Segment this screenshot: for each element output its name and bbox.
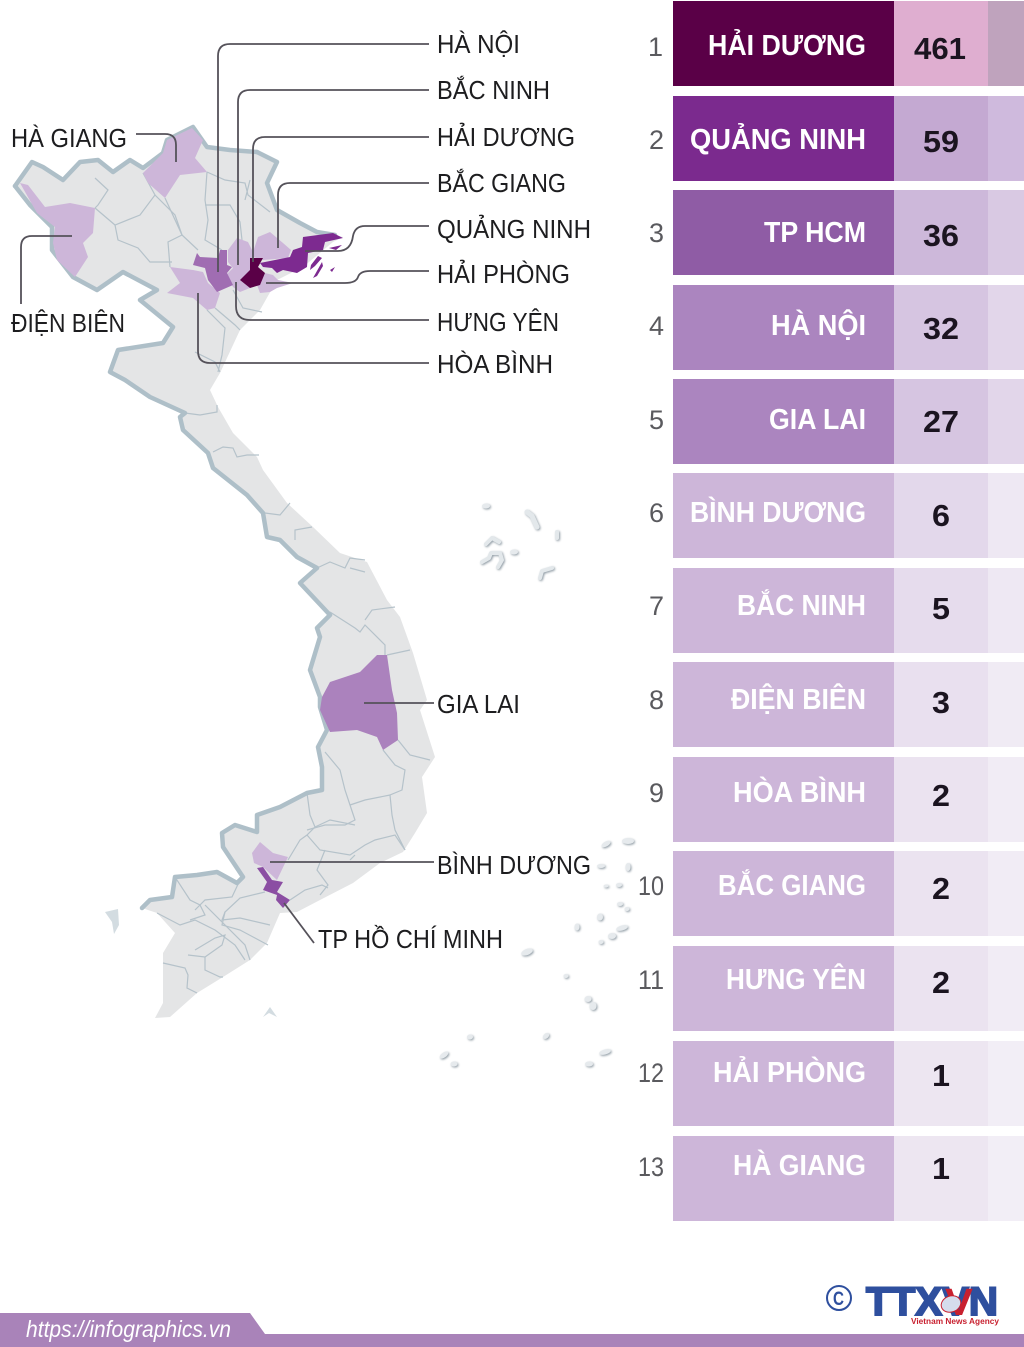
row 1 <box>648 1 1024 86</box>
row 3: 36 <box>923 218 959 253</box>
map labels: HẢI DƯƠNG <box>437 122 575 152</box>
row 7: 5 <box>932 591 950 626</box>
row 3 <box>649 190 1024 275</box>
map labels: TP HỒ CHÍ MINH <box>318 924 503 954</box>
row 5 <box>649 379 1024 464</box>
province: Hải Dương <box>240 258 265 288</box>
row 8 <box>649 662 1024 747</box>
row 9: 9 <box>649 778 664 808</box>
province: Hà Nội <box>193 250 233 292</box>
row 7: 7 <box>649 591 664 621</box>
map labels: HÒA BÌNH <box>437 349 553 379</box>
row 12: HẢI PHÒNG <box>713 1055 866 1089</box>
row 3: TP HCM <box>764 217 866 249</box>
row 4 <box>649 285 1024 370</box>
row 9: 2 <box>932 778 950 813</box>
map labels <box>11 29 591 954</box>
row 7: BẮC NINH <box>737 588 866 622</box>
province: Bắc Giang <box>253 232 291 260</box>
row 1: 1 <box>648 32 663 62</box>
row 10 <box>638 851 1024 936</box>
province: Bắc Ninh and Hưng Yên <box>226 238 253 292</box>
row 1: HẢI DƯƠNG <box>708 28 866 62</box>
map labels: BẮC GIANG <box>437 168 566 198</box>
row 12: 1 <box>932 1058 950 1093</box>
province boundaries <box>95 172 430 993</box>
row 2: 59 <box>923 124 959 159</box>
row 6 <box>649 473 1024 558</box>
copyright icon: C <box>833 1289 844 1310</box>
Phu Quoc and Con Dao islands <box>105 909 277 1017</box>
row 11: 2 <box>932 965 950 1000</box>
row 3: 3 <box>649 218 664 248</box>
logo: TTXVN: V <box>945 1282 974 1324</box>
row 4: 4 <box>649 311 664 341</box>
map of Vietnam <box>13 127 634 1066</box>
row 10: BẮC GIANG <box>718 868 866 902</box>
map labels: GIA LAI <box>437 689 520 719</box>
row 10: 2 <box>932 871 950 906</box>
row 6: BÌNH DƯƠNG <box>690 495 866 529</box>
province: Quảng Ninh <box>260 233 343 278</box>
row 1: 461 <box>914 31 966 66</box>
row 13: HÀ GIANG <box>733 1148 866 1182</box>
Trường Sa islands <box>438 838 634 1066</box>
province: Gia Lai <box>320 655 398 750</box>
row 11 <box>638 946 1024 1031</box>
row 11: 11 <box>638 965 664 995</box>
map labels: HẢI PHÒNG <box>437 259 570 289</box>
map labels: HÀ NỘI <box>437 29 520 59</box>
province: Hòa Bình <box>167 267 220 310</box>
row 8: 8 <box>649 685 664 715</box>
map labels: ĐIỆN BIÊN <box>11 308 125 338</box>
map labels: QUẢNG NINH <box>437 214 591 244</box>
map labels: BẮC NINH <box>437 75 550 105</box>
leader lines <box>21 44 434 943</box>
province: Hải Phòng <box>257 273 293 293</box>
row 6: 6 <box>649 498 664 528</box>
row 13: 13 <box>638 1152 664 1182</box>
row 13: 1 <box>932 1151 950 1186</box>
row 7 <box>649 568 1024 653</box>
row 12 <box>638 1041 1024 1126</box>
row 9 <box>649 757 1024 842</box>
row 4: 32 <box>923 311 959 346</box>
province: Hà Giang <box>143 128 207 198</box>
logo: TTXVN: Vietnam News Agency <box>911 1316 999 1326</box>
copyright icon <box>827 1286 851 1310</box>
land border <box>15 127 335 908</box>
row 8: 3 <box>932 685 950 720</box>
highlighted provinces <box>20 128 398 908</box>
row 13 <box>638 1136 1024 1221</box>
ranking table <box>638 1 1024 1221</box>
row 5: GIA LAI <box>769 404 866 436</box>
row 2 <box>649 96 1024 181</box>
row 5: 5 <box>649 405 664 435</box>
Hoàng Sa islands <box>482 504 557 578</box>
map labels: HÀ GIANG <box>11 123 127 153</box>
map labels: HƯNG YÊN <box>437 307 559 337</box>
row 11: HƯNG YÊN <box>726 962 866 996</box>
footer band <box>0 1313 1024 1347</box>
map labels: BÌNH DƯƠNG <box>437 850 591 880</box>
row 12: 12 <box>638 1058 664 1088</box>
province: Điện Biên <box>20 183 95 277</box>
row 8: ĐIỆN BIÊN <box>731 682 866 716</box>
province: TP Hồ Chí Minh <box>257 867 290 908</box>
row 9: HÒA BÌNH <box>733 775 866 809</box>
province: Bình Dương <box>252 842 288 880</box>
source URL: https://infographics.vn <box>26 1316 231 1342</box>
row 2: QUẢNG NINH <box>690 122 866 156</box>
row 2: 2 <box>649 125 664 155</box>
row 5: 27 <box>923 404 959 439</box>
mainland <box>13 127 435 1018</box>
row 4: HÀ NỘI <box>771 308 866 342</box>
row 10: 10 <box>638 871 664 901</box>
logo: TTXVN: TTXVN <box>866 1280 998 1324</box>
row 6: 6 <box>932 498 950 533</box>
